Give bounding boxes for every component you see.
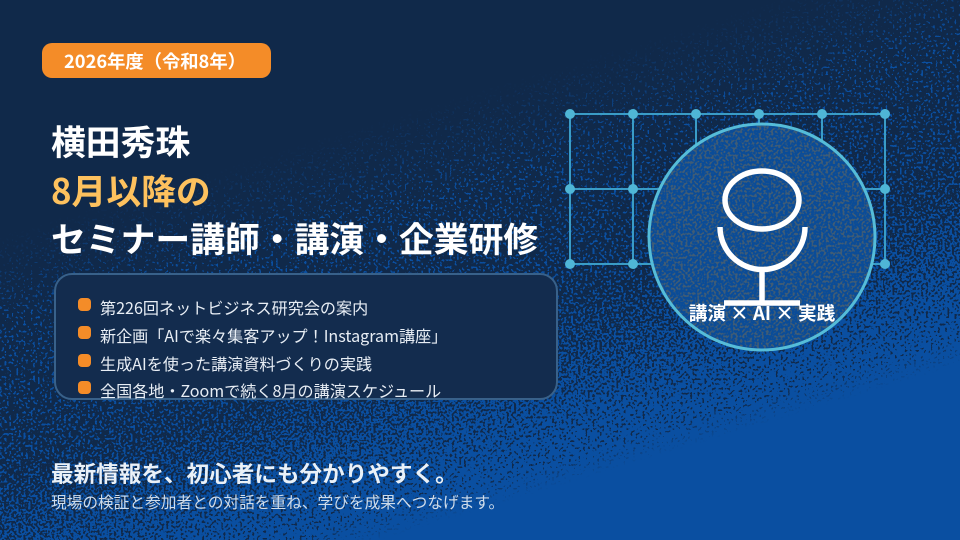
title: seminar subjects: セミナー講師・講演・企業研修 bbox=[51, 213, 538, 263]
title: highlighted period: 8月以降の bbox=[51, 165, 211, 215]
topic 4: 全国各地・Zoomで続く8月の講演スケジュール bbox=[100, 378, 441, 402]
tagline subtext: 現場の検証と参加者との対話を重ね、学びを成果へつなげます。 bbox=[51, 490, 504, 513]
bullet 4 bbox=[78, 381, 91, 394]
network grid bbox=[565, 109, 890, 269]
topic 3: 生成AIを使った講演資料づくりの実践 bbox=[100, 351, 372, 375]
topic 1: 第226回ネットビジネス研究会の案内 bbox=[100, 295, 368, 319]
title block bbox=[51, 116, 538, 263]
circle caption: 講演 × AI × 実践 bbox=[689, 299, 836, 326]
circle badge bbox=[649, 124, 875, 350]
topic 2: 新企画「AIで楽々集客アップ！Instagram講座」 bbox=[100, 323, 447, 347]
bullet 3 bbox=[78, 354, 91, 367]
panel: topics list bbox=[54, 273, 558, 400]
badge: fiscal year bbox=[42, 43, 271, 78]
icon: microphone bbox=[720, 171, 805, 303]
tagline heading: 最新情報を、初心者にも分かりやすく。 bbox=[51, 456, 458, 489]
badge: fiscal year: 2026年度（令和8年） bbox=[64, 48, 246, 74]
bullet 1 bbox=[78, 298, 91, 311]
tagline block bbox=[51, 456, 504, 513]
title: name: 横田秀珠 bbox=[51, 116, 190, 166]
bullet 2 bbox=[78, 326, 91, 339]
